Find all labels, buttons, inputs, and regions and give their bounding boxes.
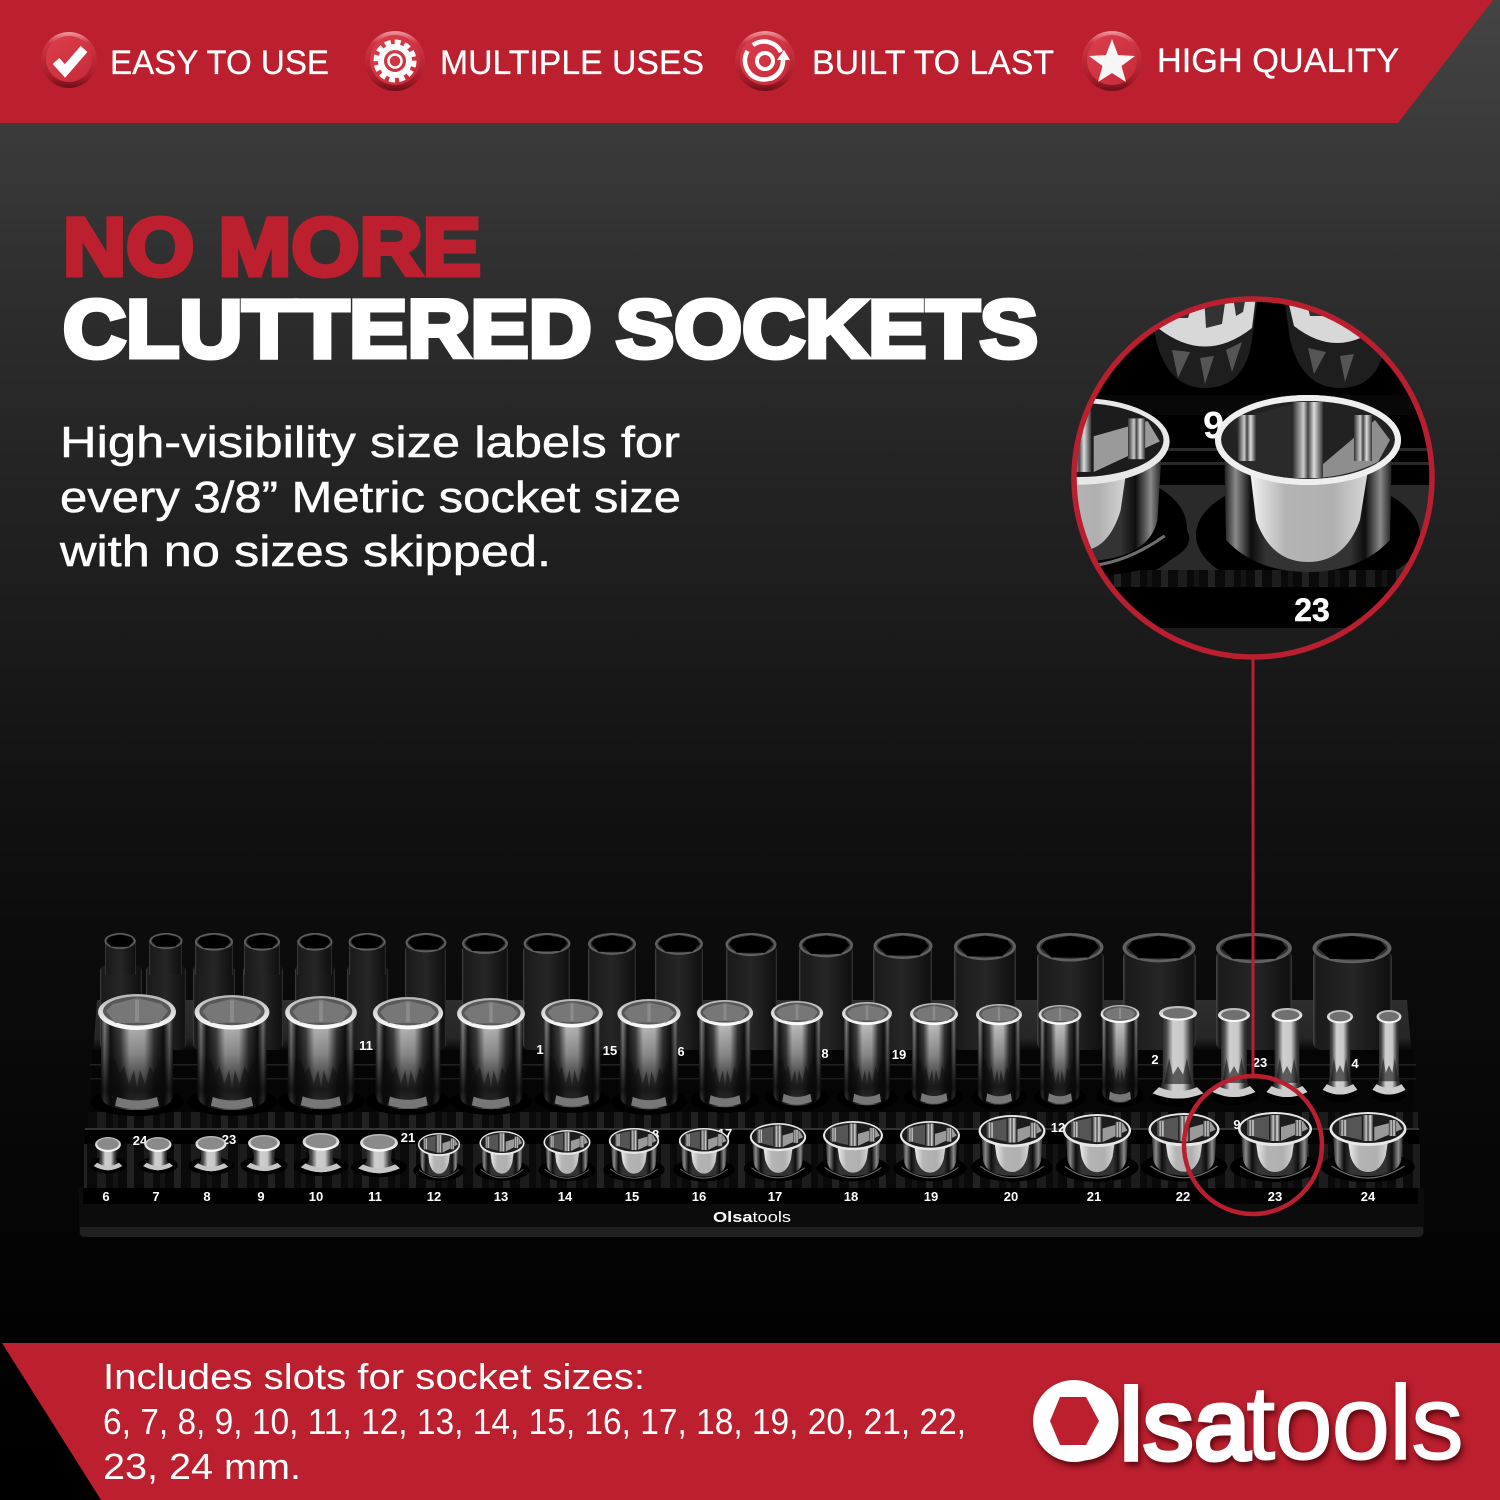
tray top surface — [83, 1000, 1423, 1188]
front label strip: 24 — [1361, 1189, 1376, 1204]
back row size labels: 19 — [892, 1047, 906, 1062]
front label strip: 9 — [257, 1189, 265, 1204]
feature: built to last: BUILT TO LAST — [812, 44, 1054, 82]
back row size labels: 4 — [1351, 1056, 1359, 1071]
heading: CLUTTERED SOCKETS — [63, 284, 1038, 375]
back row size labels: 8 — [821, 1046, 829, 1061]
brand logo: lsa — [1120, 1369, 1251, 1481]
front label strip: 21 — [1087, 1189, 1101, 1204]
feature: easy to use — [41, 32, 329, 88]
small highlight circle — [1184, 1076, 1322, 1214]
front label strip — [83, 1188, 1418, 1204]
chrome socket front row — [89, 1112, 1415, 1182]
front label strip: 15 — [625, 1189, 639, 1204]
heading — [63, 202, 1038, 375]
body text — [59, 418, 681, 576]
brand logo — [1033, 1364, 1462, 1482]
middle row size labels: 18 — [645, 1127, 659, 1142]
front label strip: 7 — [152, 1189, 160, 1204]
tray base — [79, 1186, 1424, 1237]
front label strip: 19 — [924, 1189, 938, 1204]
sizes text: 23, 24 mm. — [103, 1446, 301, 1487]
body text: every 3/8” Metric socket size — [60, 473, 681, 522]
feature: multiple uses — [365, 31, 704, 91]
connector line — [1252, 659, 1254, 1075]
brand logo: tools — [1246, 1364, 1462, 1482]
tray brand logo: Olsa tools — [713, 1209, 791, 1226]
front label strip: 23 — [1268, 1189, 1282, 1204]
middle row size labels: 17 — [718, 1126, 732, 1141]
front label strip: 10 — [309, 1189, 323, 1204]
feature: multiple uses: MULTIPLE USES — [440, 44, 704, 82]
inset size label nine: 9 — [1203, 405, 1224, 447]
sizes text: 6, 7, 8, 9, 10, 11, 12, 13, 14, 15, 16, 17, 18, 19, 20, 21, 22, — [103, 1401, 966, 1442]
middle row size labels — [133, 1117, 1241, 1148]
front label strip: 16 — [692, 1189, 706, 1204]
back row size labels: 1 — [536, 1042, 544, 1057]
middle row size labels: 23 — [222, 1132, 236, 1147]
front label strip: 18 — [844, 1189, 858, 1204]
sizes text: Includes slots for socket sizes: — [103, 1356, 645, 1397]
front label strip: 14 — [558, 1189, 573, 1204]
feature: high quality: HIGH QUALITY — [1157, 42, 1399, 80]
back row size labels: 23 — [1253, 1055, 1267, 1070]
back row size labels: 6 — [677, 1044, 685, 1059]
front label strip: 22 — [1176, 1189, 1190, 1204]
sizes text — [103, 1356, 966, 1487]
front label strip: 12 — [427, 1189, 441, 1204]
heading: NO MORE — [63, 202, 481, 293]
bottom banner — [2, 1343, 1500, 1500]
middle row size labels: 24 — [133, 1133, 148, 1148]
feature: built to last — [735, 31, 1054, 91]
front label strip: 20 — [1004, 1189, 1018, 1204]
inset label strip — [1161, 598, 1346, 654]
top banner — [0, 0, 1493, 123]
inset label strip: 23 — [1294, 592, 1330, 628]
tray slots and reflections — [84, 1050, 1420, 1188]
brand logo: O — [1040, 1364, 1122, 1482]
front label strip: 17 — [768, 1189, 782, 1204]
middle row size labels: 9 — [1233, 1117, 1241, 1132]
feature: high quality — [1082, 31, 1399, 91]
socket tray product — [79, 933, 1424, 1237]
back row size labels: 11 — [359, 1038, 373, 1053]
inset tray reflections — [1106, 448, 1429, 587]
back row size labels: 15 — [603, 1043, 617, 1058]
back row size labels — [359, 1038, 1359, 1071]
chrome socket middle row — [90, 994, 1407, 1116]
body text: with no sizes skipped. — [59, 527, 551, 576]
inset main socket — [1215, 395, 1401, 572]
body text: High-visibility size labels for — [60, 418, 680, 467]
black socket back row — [100, 933, 1392, 1050]
middle row size labels: 21 — [401, 1130, 415, 1145]
front label strip: 13 — [494, 1189, 508, 1204]
inset upper sockets — [1155, 302, 1382, 388]
front label strip: 6 — [102, 1189, 110, 1204]
feature: easy to use: EASY TO USE — [110, 44, 329, 82]
front label strip: 8 — [203, 1189, 211, 1204]
magnified inset — [1071, 296, 1435, 660]
middle row size labels: 12 — [1051, 1120, 1065, 1135]
front label strip: 11 — [368, 1189, 382, 1204]
inset left socket — [1076, 398, 1190, 575]
back row size labels: 2 — [1151, 1052, 1159, 1067]
